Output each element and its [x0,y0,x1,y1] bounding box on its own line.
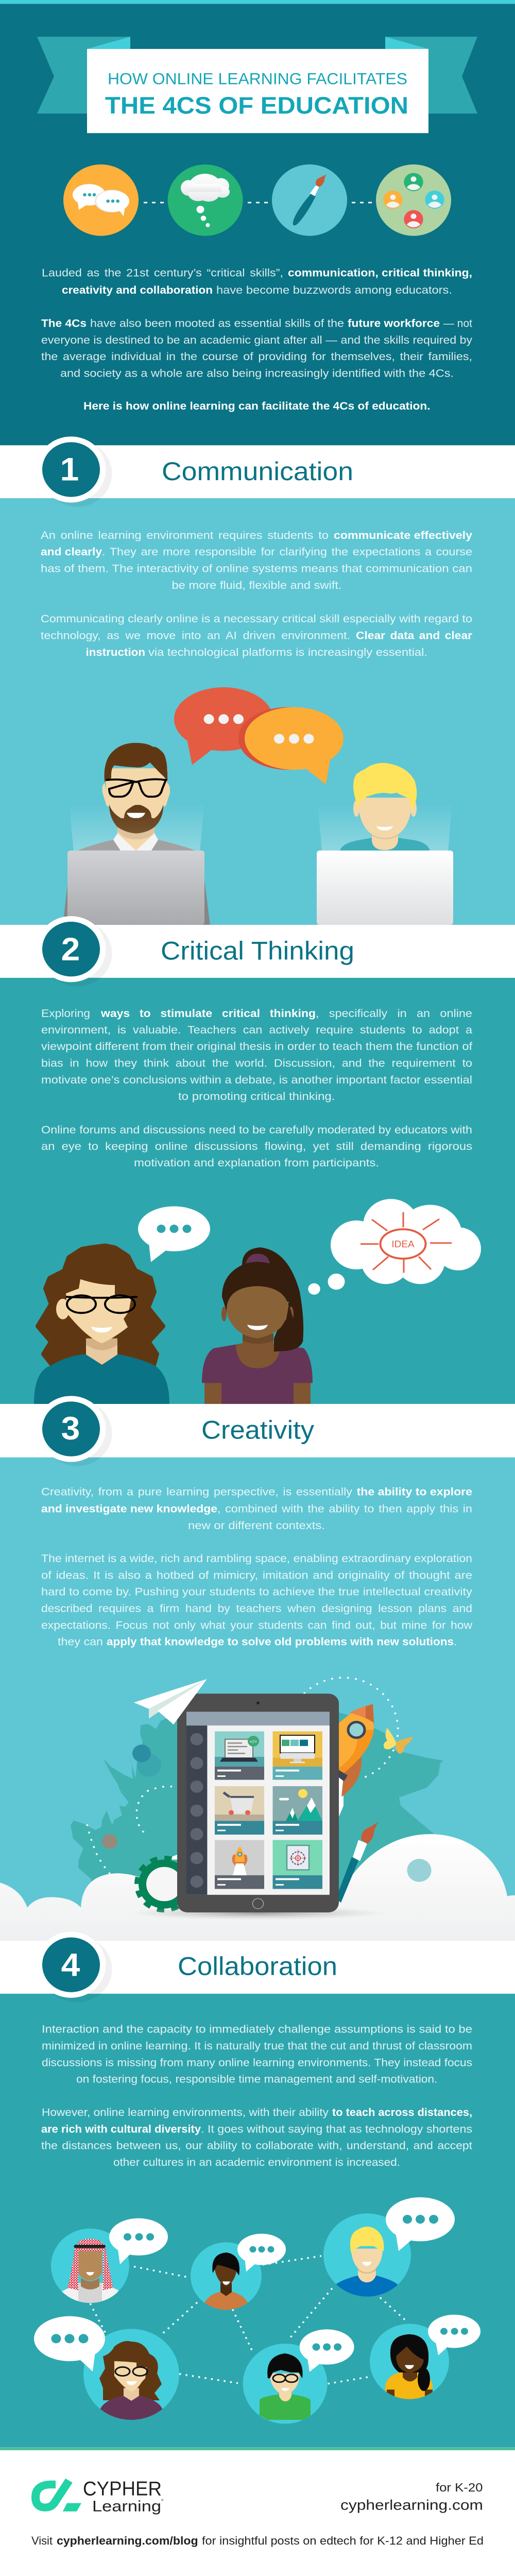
person: woman with ponytail [202,1247,313,1404]
bubble [109,2218,168,2264]
section band 4: collaboration [0,1932,515,2002]
critical thinking body text: an eye to keeping online discussions flowing, yet still demanding rigorous [41,1141,472,1153]
critical thinking body text: viewpoint different from their original thesis in order to teach them the function of [41,1040,472,1053]
person: blond boy with laptop [317,763,453,925]
person: woman with glasses [34,1246,169,1404]
collaboration body text: discussions is missing from many online learning environments. They instead focus [42,2057,472,2069]
number 3: 3 [61,1410,80,1447]
paintbrush [336,1822,379,1903]
thought cloud: idea: IDEA [391,1239,415,1249]
creativity body text: . [454,1636,457,1648]
person: woman with side ponytail [370,2315,480,2400]
communication body text: Communicating clearly online is a necessary critical skill especially with regard to [41,613,472,625]
thought cloud: idea [308,1199,481,1295]
communication body text: Clear data and clear [356,630,473,641]
card: shopping cart [215,1786,264,1835]
top accent stripe [0,0,515,4]
intro text: The 4Cs [41,317,87,329]
intro text: have also been mooted as essential skills of the [90,317,344,329]
speech bubble: red [174,687,337,770]
rocket [335,1704,374,1820]
paint splash [71,1713,443,1908]
icon row: the 4Cs [63,164,451,236]
title line 1: HOW ONLINE LEARNING FACILITATES [108,70,407,88]
illustration: network of diverse learners [34,2197,480,2424]
number 2: 2 [61,931,80,968]
intro text: — not [443,317,472,329]
paper plane [134,1679,207,1724]
creativity body text: and investigate new knowledge [41,1503,217,1515]
intro text: the average individual in the course of providing for themselves, their families, [41,351,472,363]
communication body text: via technological platforms is increasingly essential. [148,646,427,658]
dotted connections [90,2256,406,2384]
contact: website: cypherlearning.com [340,2497,483,2513]
bubble [237,2234,286,2272]
person: bearded man with laptop [63,743,210,925]
critical thinking body text: Online forums and discussions need to be carefully moderated by educators with [41,1124,472,1136]
critical thinking body text: Exploring [41,1007,90,1020]
critical thinking body text: motivate one’s conclusions within a debate, is another important factor essential [41,1074,472,1086]
panel: collaboration background [0,1994,515,2447]
creativity body text: new or different contexts. [188,1519,325,1532]
creativity body text: hard to come by. Pushing your students to achieve the true intellectual creativity [41,1586,472,1598]
intro text: and society as a whole are also being increasingly identified with the 4Cs. [60,367,454,379]
section band 2: critical thinking [0,916,515,986]
intro text: communication, critical thinking, [288,267,472,279]
card: desktop monitor [273,1732,322,1780]
butterfly [384,1728,413,1754]
illustration: two students with speech and idea bubbles [34,1199,481,1404]
person: man in keffiyeh [51,2218,168,2310]
communication body text: . They are more responsible for clarifying the expectations a course [102,546,472,558]
collaboration body text: the distances between us, our ability to collaborate with, understand, and accept [41,2140,472,2152]
glasses [106,779,166,796]
communication body text: technology, as we move into an AI driven environment. [41,630,350,641]
bubble [428,2315,480,2355]
critical thinking body text: environment, is valuable. Teachers can actively require students to adopt a [41,1024,472,1036]
communication body text [41,530,473,658]
bubble [386,2197,455,2251]
contact: for K-20: for K-20 [436,2481,483,2494]
section band 3: creativity [0,1396,515,1466]
logo: Cypher Learning: Learning [92,2498,161,2515]
critical thinking body text: , specifically in an online [316,1007,472,1020]
bubble [34,2316,105,2371]
bubble [300,2329,354,2372]
heading: collaboration: Collaboration [178,1952,337,1980]
person: woman with curly hair [34,2316,179,2422]
person: woman with short black hair [191,2234,286,2315]
collaboration body text: on fostering focus, responsible time management and self-motivation. [76,2073,437,2085]
collaboration body text: . It goes without saying that as technology shortens [201,2123,472,2135]
communication body text: has of them. The interactivity of online systems means that communication can [41,563,472,574]
decorative planets [102,1744,161,1849]
panel: communication background [0,498,515,925]
card: coding laptop: </> [250,1739,258,1744]
intro text: creativity and collaboration [62,284,213,296]
intro text: Lauded as the 21st century’s “critical skills”, [42,267,283,279]
panel: critical thinking background [0,978,515,1404]
communication body text: communicate effectively [334,530,472,541]
card: gear blueprint [273,1840,322,1889]
footer call to action: Visit [31,2535,53,2547]
critical thinking body text: motivation and explanation from participants. [134,1157,379,1169]
speech bubble: orange [245,707,344,785]
communication body text: and clearly [41,546,102,558]
panel: intro background [0,0,515,445]
intro text: future workforce [348,317,440,329]
creativity body text: , combined with the ability to then apply this in [217,1503,472,1515]
icon: thought cloud [168,164,243,236]
tablet [177,1693,339,1912]
clouds base [0,1834,515,1941]
critical thinking body text [41,1007,472,1169]
person: blond man [323,2197,455,2300]
communication body text: be more fluid, flexible and swift. [172,580,342,591]
collaboration body text: other cultures in an academic environment is increased. [113,2157,400,2168]
icon: paintbrush [272,164,347,236]
illustration: tablet with creative elements [0,1677,515,1941]
logo: Cypher Learning: ® [161,2499,164,2502]
footer call to action: for insightful posts on edtech for K-12 and Higher Ed [202,2535,484,2547]
intro text: Here is how online learning can facilitate the 4Cs of education. [83,400,431,412]
intro text: have become buzzwords among educators. [216,284,452,296]
gear [137,1858,192,1910]
creativity body text: The internet is a wide, rich and rambling space, enabling extraordinary exploration [41,1552,472,1565]
creativity body text [41,1486,473,1648]
heading: critical thinking: Critical Thinking [161,936,354,965]
creativity body text: described requires a firm hand by teachers when designing lesson plans and [41,1602,472,1615]
communication body text: instruction [85,646,145,658]
communication body text: An online learning environment requires students to [41,530,329,541]
collaboration body text: Interaction and the capacity to immediately challenge assumptions is said to be [42,2023,472,2035]
collaboration body text: However, online learning environments, with their ability [42,2107,329,2119]
collaboration body text: minimized in online learning. It is naturally true that the cut and thrust of classroom [42,2040,472,2052]
panel: creativity background [0,1458,515,1941]
collaboration body text: to teach across distances, [332,2107,472,2119]
creativity body text: apply that knowledge to solve old problems with new solutions [107,1636,454,1648]
critical thinking body text: ways to stimulate critical thinking [100,1007,316,1020]
section band 1: communication [0,436,515,507]
person: man with black hair and glasses [243,2329,354,2424]
number 4: 4 [61,1947,80,1983]
intro text: everyone is destined to be an academic giant after all — and the skills required by [41,334,472,346]
footer call to action [31,2535,484,2547]
critical thinking body text: to promoting critical thinking. [178,1090,335,1103]
intro text [41,267,472,412]
creativity body text: the ability to explore [357,1486,472,1498]
creativity body text: of ideas. It is also a hotbed of mimicry, imitation and originality of thought are [41,1569,472,1582]
title line 2: THE 4CS OF EDUCATION [105,92,408,119]
creativity body text: expectations. Focus not only what your students can find out, but mine for how [41,1619,473,1632]
heading: creativity: Creativity [201,1415,314,1444]
footer call to action: cypherlearning.com/blog [57,2535,198,2547]
creativity body text: they can [58,1636,103,1648]
speech bubble [138,1206,210,1262]
connector dashes [144,202,372,204]
critical thinking body text: bias in how they think about the world. Discussion, and the requirement to [41,1057,472,1070]
tablet shadow [129,1906,386,1920]
heading: communication: Communication [162,456,353,486]
icon: network of people [376,164,451,236]
footer [0,2447,515,2576]
logo: Cypher Learning: CYPHER [83,2478,162,2500]
card: launching rocket [215,1840,264,1889]
card: mountains [273,1786,322,1835]
creativity body text: Creativity, from a pure learning perspective, is essentially [41,1486,352,1498]
card: coding laptop [215,1732,264,1780]
number 1: 1 [60,451,79,487]
icon: speech bubbles [63,164,139,236]
collaboration body text: are rich with cultural diversity [41,2123,201,2135]
logo: Cypher Learning [36,2478,164,2515]
illustration: two people chatting on laptops [63,687,453,925]
title ribbon banner [37,37,477,133]
collaboration body text [41,2023,472,2168]
